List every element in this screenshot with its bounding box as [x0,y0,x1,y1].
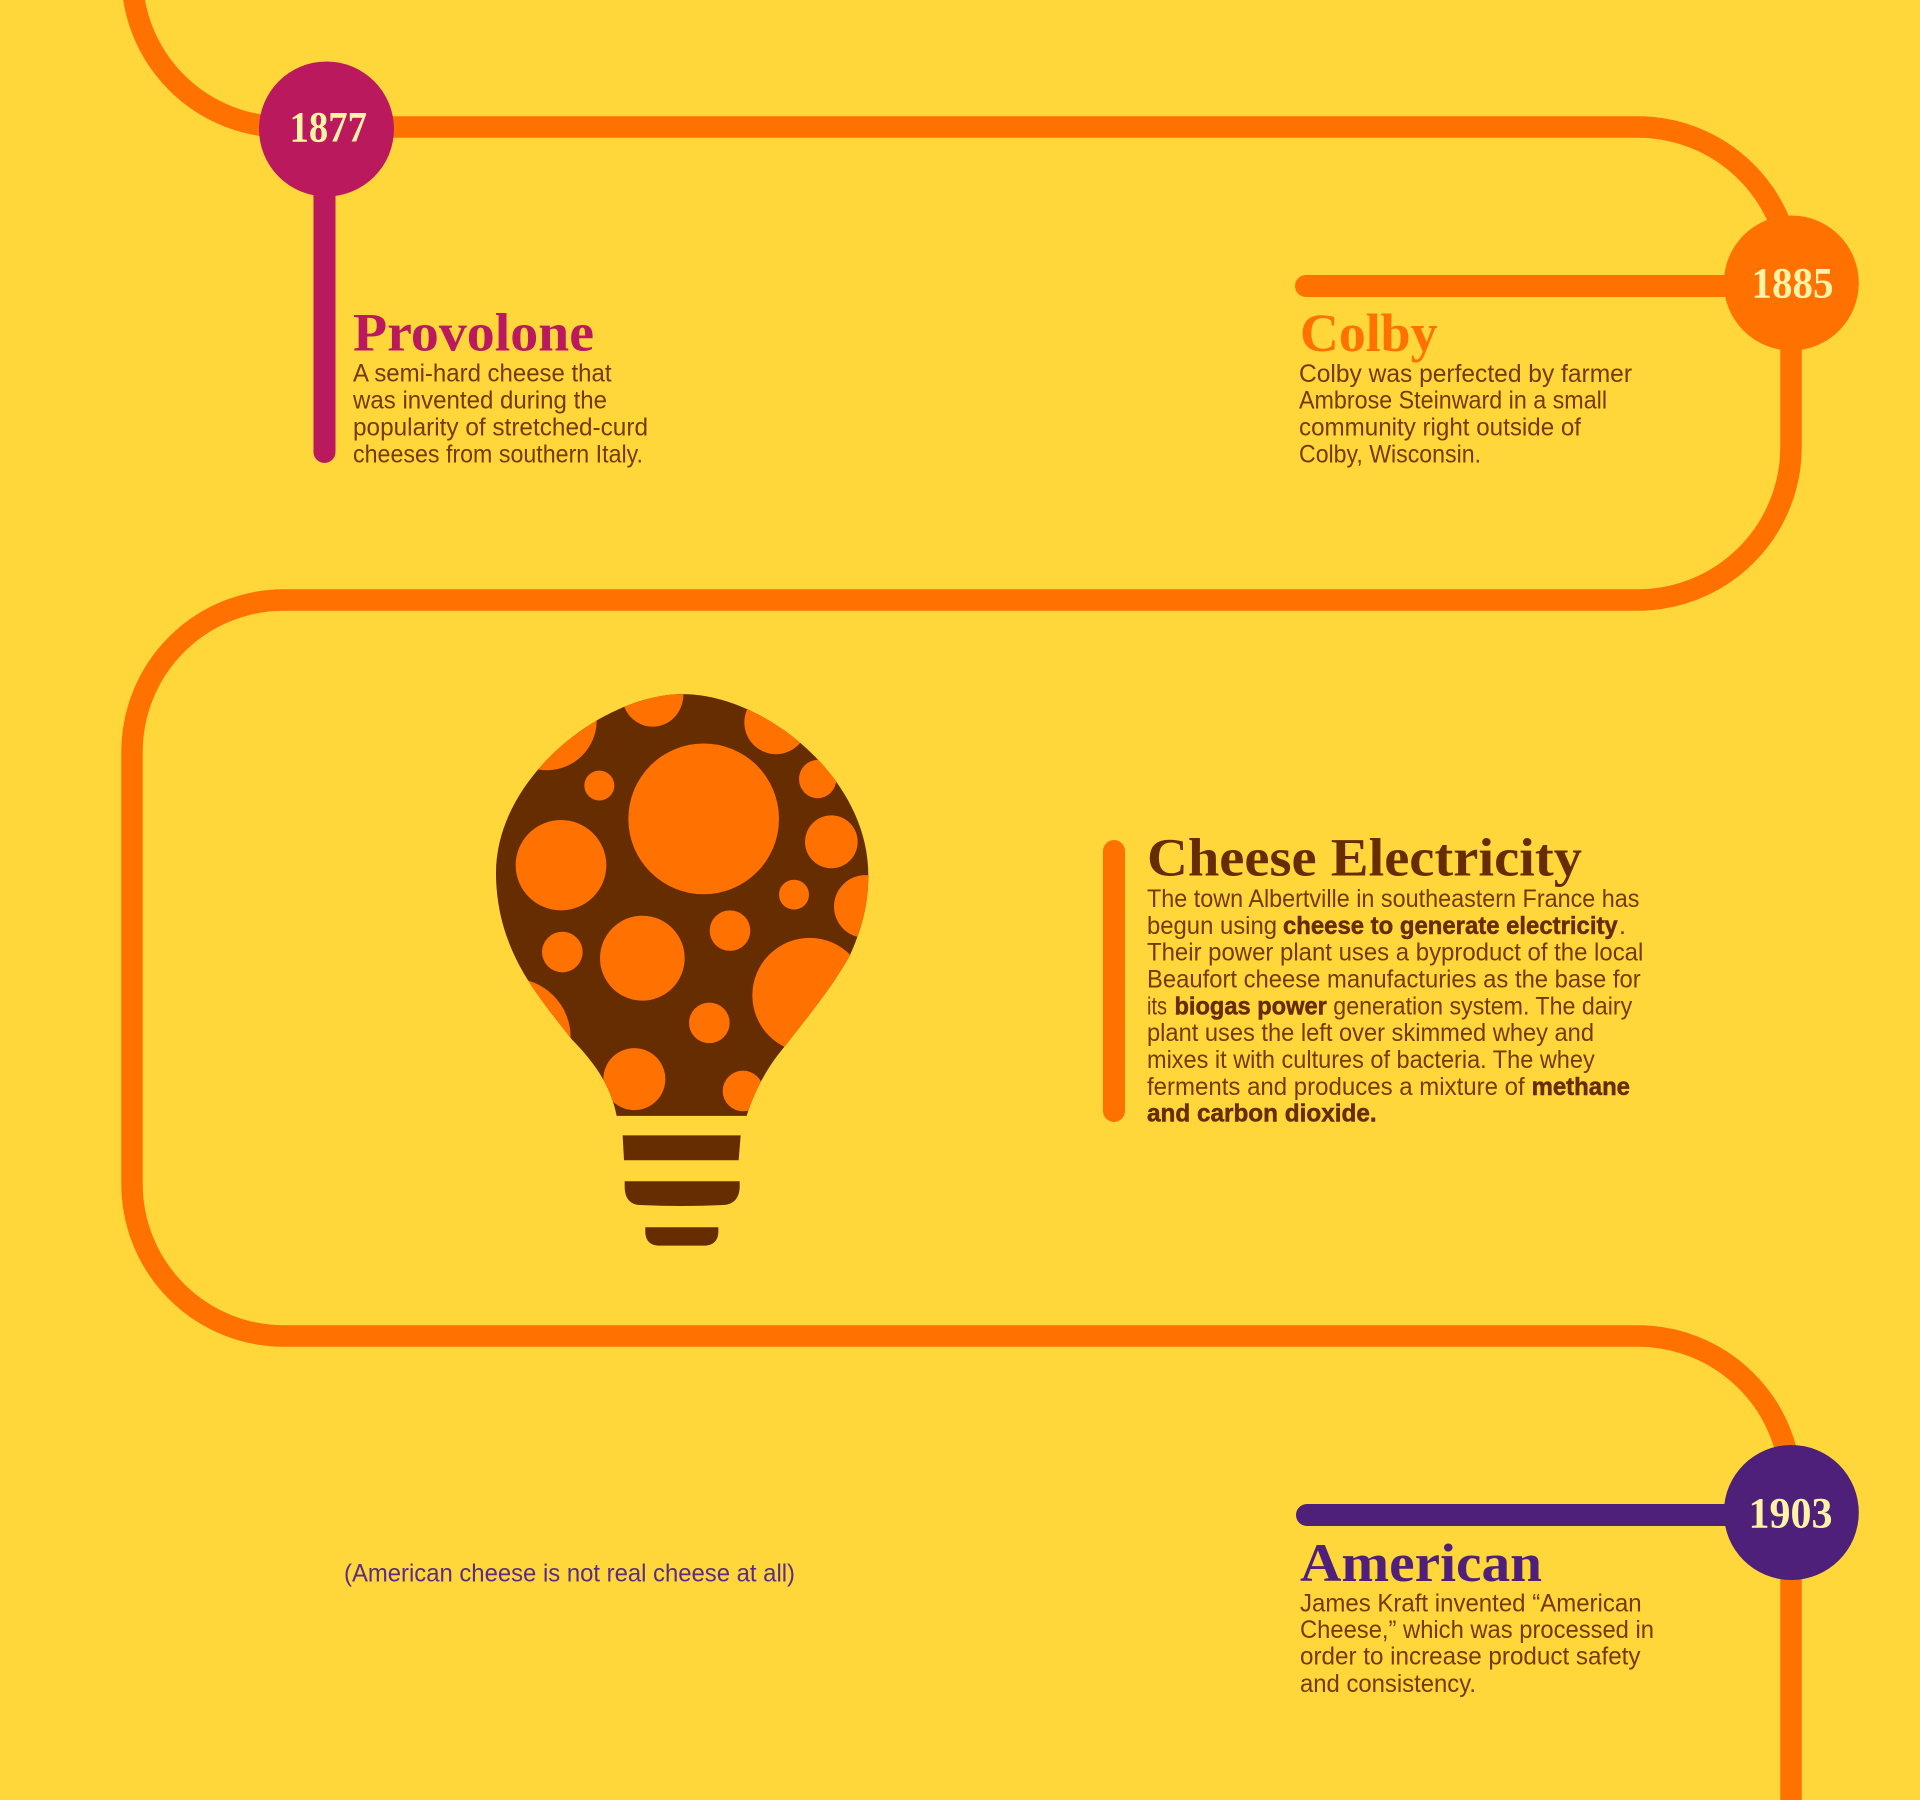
text block: Colby description: Ambrose Steinward in a small [1299,387,1607,415]
panel: Colby 1885 [1299,216,1859,468]
year marker: 1903 [1724,1445,1859,1580]
year marker: 1877 [259,62,394,196]
text block: Cheese Electricity description: generation system. The dairy [1333,992,1633,1020]
text block: Provolone description: cheeses from southern Italy. [353,440,643,468]
connector bar: 1903 [1307,1504,1740,1526]
text block: Cheese Electricity description: . [1619,912,1626,940]
panel: Provolone 1877 [259,62,648,468]
text block: Provolone description [352,360,648,468]
heading: Colby: Colby [1300,303,1438,363]
text block: Cheese Electricity description: biogas power [1174,992,1327,1020]
text block: Colby description [1299,360,1632,468]
icon: cheese light bulb [452,663,897,1246]
heading: Provolone: Provolone [353,302,594,362]
panel: American 1903 [1300,1445,1859,1698]
stem: 1877 [314,150,336,452]
text block: American description: James Kraft invented “American [1300,1589,1642,1617]
text block: Provolone description: popularity of stretched-curd [353,414,648,442]
accent bar [1103,851,1125,1111]
text block: Cheese Electricity description: plant uses the left over skimmed whey and [1147,1019,1594,1047]
text block: American description [1300,1589,1654,1698]
text block: Provolone description: A semi-hard cheese that [353,360,612,388]
text block: American description: order to increase product safety [1300,1643,1641,1671]
text block: Cheese Electricity description: ferments and produces a mixture of [1147,1073,1525,1101]
text block: Cheese Electricity description: mixes it with cultures of bacteria. The whey [1147,1046,1595,1074]
year marker: 1903: 1903 [1748,1490,1832,1538]
panel: Cheese Electricity [1114,828,1643,1128]
text block: Cheese Electricity description: Their power plant uses a byproduct of the local [1147,939,1643,967]
year marker: 1885: 1885 [1752,260,1834,308]
text block: American description: and consistency. [1300,1670,1476,1698]
bulb base bands [623,1135,741,1246]
text block: Cheese Electricity description: The town Albertville in southeastern France has [1147,885,1640,913]
year marker: 1877: 1877 [290,104,367,152]
text block: Cheese Electricity description: methane [1532,1073,1630,1101]
heading: Cheese Electricity: Cheese Electricity [1147,828,1582,888]
bulb glass [496,694,868,1116]
text block: Cheese Electricity description: and carbon dioxide. [1147,1100,1377,1128]
text block: Provolone description: was invented during the [352,386,607,414]
text block: Cheese Electricity description: its [1147,992,1167,1020]
text block: Colby description: Colby was perfected by farmer [1299,360,1632,388]
text block: Cheese Electricity description: cheese to generate electricity [1283,912,1618,940]
year marker: 1885 [1724,216,1859,350]
cheese holes [516,694,868,1112]
callout: American cheese note: (American cheese is not real cheese at all) [344,1559,795,1587]
connector bar: 1885 [1306,275,1740,297]
text block: Colby description: community right outside of [1299,413,1581,441]
text block: Colby description: Colby, Wisconsin. [1299,440,1481,468]
text block: American description: Cheese,” which was processed in [1300,1616,1654,1644]
text block: Cheese Electricity description: begun using [1147,912,1277,940]
heading: American: American [1300,1533,1542,1593]
text block: Cheese Electricity description: Beaufort cheese manufacturies as the base for [1147,966,1641,994]
text block: Cheese Electricity description [1147,885,1643,1128]
